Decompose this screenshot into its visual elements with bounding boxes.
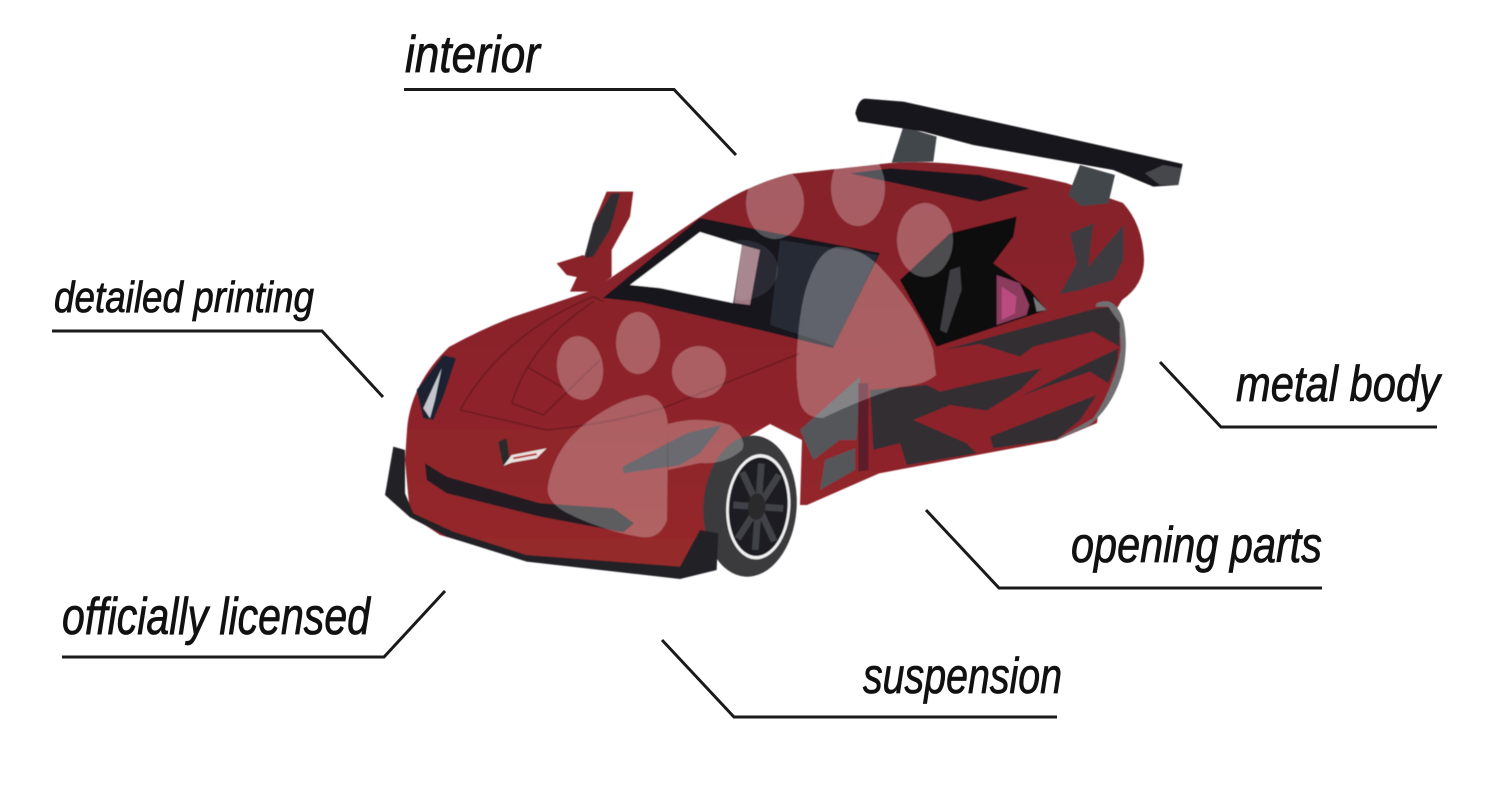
label: opening parts	[926, 510, 1322, 588]
front wheel	[699, 432, 801, 580]
rear wing	[855, 99, 1183, 206]
car illustration	[385, 99, 1183, 580]
grille	[425, 463, 634, 532]
windshield and cabin glass	[603, 218, 880, 348]
corvette logo	[498, 438, 547, 467]
label: suspension: suspension	[863, 648, 1062, 704]
label: detailed printing: detailed printing	[54, 273, 314, 322]
door opening interior	[900, 217, 1047, 347]
label: officially licensed: officially licensed	[62, 588, 372, 646]
translucent paw watermark	[548, 150, 953, 537]
front detail	[385, 192, 801, 580]
label: interior	[404, 26, 736, 155]
hood creases	[460, 297, 800, 430]
label: suspension	[662, 640, 1062, 717]
right headlight	[623, 425, 722, 473]
label: interior: interior	[405, 26, 542, 84]
rear quarter graphics	[1060, 223, 1123, 294]
car body	[405, 162, 1144, 572]
left headlight	[417, 355, 456, 420]
rear window	[850, 168, 1030, 202]
label: metal body	[1160, 356, 1442, 427]
front fender graphics	[800, 377, 860, 460]
label: detailed printing	[52, 273, 383, 397]
label: opening parts: opening parts	[1071, 517, 1322, 573]
label: metal body: metal body	[1236, 356, 1442, 412]
door panel	[860, 307, 1121, 473]
side mirror	[570, 192, 633, 292]
open door	[800, 223, 1126, 490]
door graphics	[943, 307, 1120, 357]
door edge	[1057, 301, 1126, 440]
front splitter	[385, 447, 718, 579]
